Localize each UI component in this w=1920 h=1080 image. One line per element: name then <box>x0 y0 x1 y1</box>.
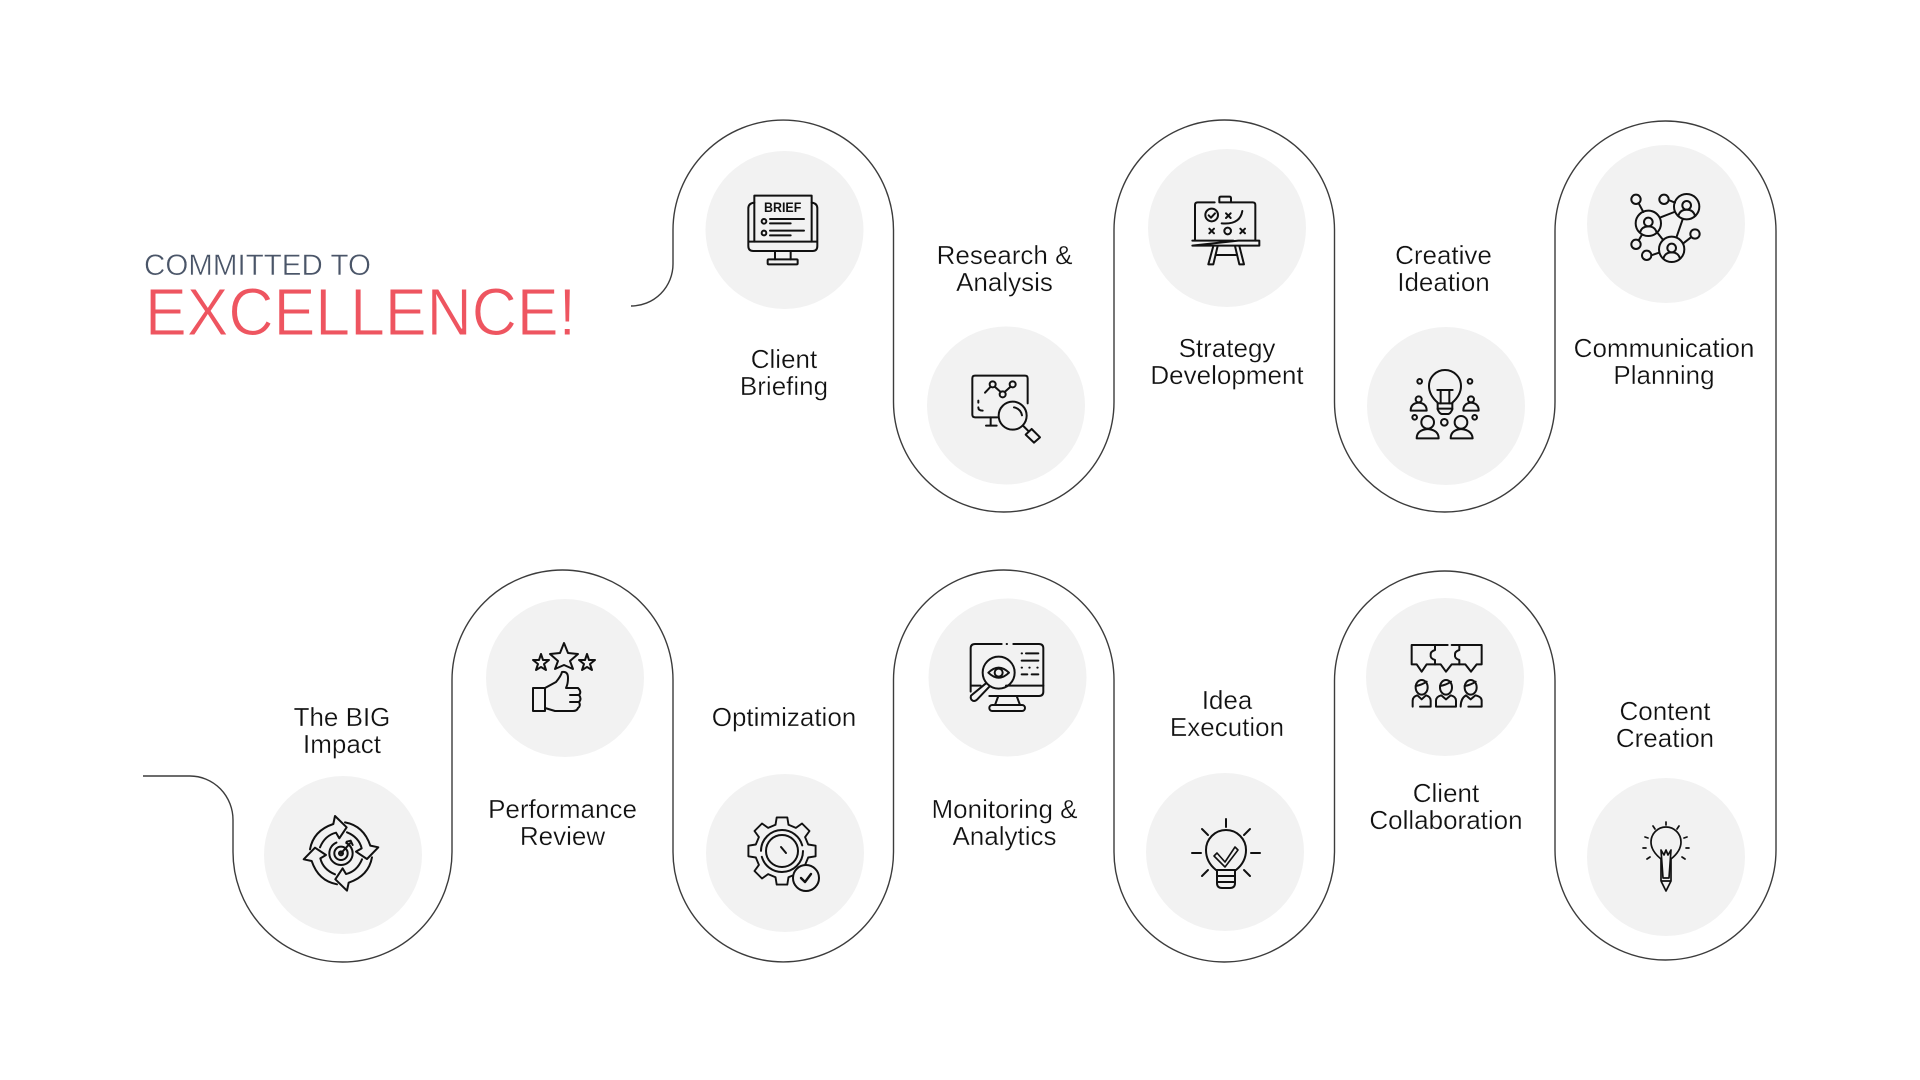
icon: bulb with people <box>1411 370 1479 438</box>
label: Impact <box>303 729 382 759</box>
icon: people network <box>1631 194 1700 262</box>
step: monitoring and analytics <box>928 598 1086 851</box>
icon background <box>1148 149 1306 307</box>
step: performance review <box>486 599 644 851</box>
label: Strategy <box>1179 333 1275 363</box>
step: idea execution <box>1146 685 1304 931</box>
step: content creation <box>1587 696 1745 936</box>
icon background <box>706 774 864 932</box>
icon: gear gauge with check <box>748 817 819 891</box>
label: Monitoring & <box>932 794 1077 824</box>
label: Planning <box>1613 360 1715 390</box>
step: the big impact <box>264 702 422 934</box>
label: Research & <box>937 240 1072 270</box>
icon background <box>706 151 864 309</box>
label: Optimization <box>712 702 856 732</box>
icon background <box>1587 145 1745 303</box>
icon: brief monitor <box>748 196 817 264</box>
icon background <box>928 598 1086 756</box>
icon background <box>486 599 644 757</box>
label: Ideation <box>1397 267 1490 297</box>
label: Creative <box>1395 240 1492 270</box>
icon background <box>927 326 1085 484</box>
step: client briefing <box>706 151 864 401</box>
icon background <box>264 776 422 934</box>
icon background <box>1146 773 1304 931</box>
icon: brief monitor: BRIEF <box>764 199 802 215</box>
label: Communication <box>1574 333 1754 363</box>
title: COMMITTED TO <box>144 249 371 282</box>
icon: thumbs up with stars <box>533 643 595 711</box>
icon: strategy board <box>1192 197 1259 264</box>
serpentine path <box>143 120 1776 962</box>
title: EXCELLENCE! <box>145 275 576 350</box>
label: Development <box>1150 360 1304 390</box>
step: communication planning <box>1574 145 1754 390</box>
icon: target with cycle arrows <box>304 816 378 891</box>
label: Briefing <box>740 371 828 401</box>
step: optimization <box>706 702 864 932</box>
step: research and analysis <box>927 240 1085 484</box>
label: Analytics <box>952 821 1057 851</box>
step: strategy development <box>1148 149 1306 390</box>
step: client collaboration <box>1366 598 1524 835</box>
icon: monitor with magnifier eye <box>971 644 1043 711</box>
label: Analysis <box>956 267 1053 297</box>
label: Execution <box>1170 712 1284 742</box>
label: Idea <box>1202 685 1253 715</box>
icon: chart under magnifier <box>972 376 1040 443</box>
step: creative ideation <box>1367 240 1525 485</box>
label: Collaboration <box>1369 805 1523 835</box>
icon: bulb pencil <box>1643 822 1689 891</box>
label: Client <box>1413 778 1480 808</box>
label: Review <box>520 821 605 851</box>
label: Client <box>751 344 818 374</box>
label: Creation <box>1616 723 1714 753</box>
label: Performance <box>488 794 637 824</box>
icon background <box>1367 327 1525 485</box>
label: Content <box>1619 696 1711 726</box>
icon: team puzzle bubbles <box>1412 645 1482 707</box>
icon: bulb with check <box>1192 819 1260 888</box>
icon background <box>1366 598 1524 756</box>
icon background <box>1587 778 1745 936</box>
label: The BIG <box>294 702 390 732</box>
